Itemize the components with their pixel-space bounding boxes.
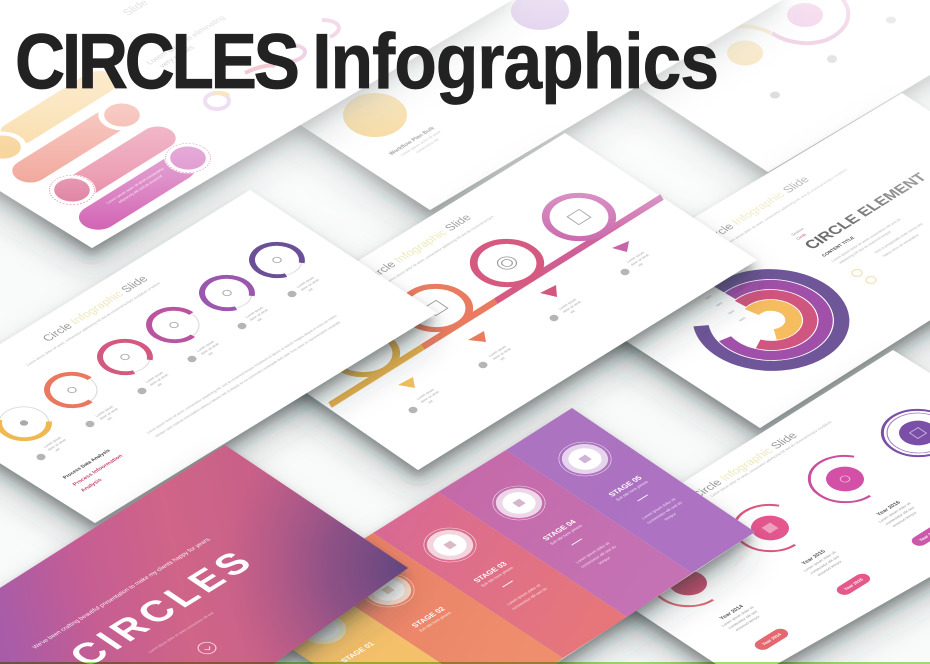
icon: yellow ring [316,322,410,384]
column: stage 03 content: Lorem ipsum dolor sit [505,583,543,606]
chart arc: purple [694,270,848,370]
text: ring labels: Lorem ipsum [145,371,165,384]
heading: circle element: CIRCLE ELEMENT [801,170,930,252]
column: stage 01 content: STAGE 01 [339,640,376,664]
text: cover caption: Lorem ipsum dolor sit amet consectetur elit sed [148,611,215,654]
text: ring labels: dolor sit amet [249,308,269,321]
icon: yellow node [727,40,763,66]
text: year caption: consectetur elit [415,137,441,154]
text: ring labels: elit [207,351,214,356]
group: year 2016: eiusmod tempor [892,511,919,528]
group: year 2014 [638,550,802,659]
text: ring labels: Lorem ipsum [196,340,216,353]
icon: label glyphs [408,269,630,413]
bar: purple [71,151,203,235]
chart: timeline bar [330,197,662,405]
text: circle tag: Circle [795,232,808,241]
icon: purple ring [532,186,626,248]
column: stage 05 content: STAGE 05 [606,474,644,498]
column: stage 05 content [548,435,691,529]
text: arc labels: Item [738,316,747,322]
stripe: stage 03 [373,492,627,658]
text: paragraph: Lorem ipsum dolor sit amet, consectetur adipiscing elit, sed do eiusmod tempor incididunt ut labore et dolore magna aliqua ut enim ad minim [146,314,338,435]
text: ring labels [43,276,324,454]
stripe: stage 02 [307,533,563,664]
text: body copy [831,213,930,277]
column: stage 02 content [351,566,456,635]
icon: triangle markers [398,241,629,388]
icon: purple circle [511,0,569,30]
text: ring labels: Lorem ipsum [245,306,265,319]
text: year caption: Workflow Plan Bulk [388,125,437,156]
text: bar captions: adipiscing elit sed do eiusmod [117,175,164,204]
text: subtitle: Lorem ipsum dolor sit amet, consectetur adipiscing elit sed do eiusmod tempor incididunt ut labore [26,282,161,367]
text: subtitle: Lorem ipsum dolor sit amet, consectetur adipiscing elit sed do eiusmod tempor [386,215,496,284]
text: timeline labels: Lorem ipsum [558,298,578,311]
text: timeline labels: dolor sit amet [492,347,512,360]
chart arc: yellow [740,300,802,340]
text: body copy: Sed ut perspiciatis unde omnis iste [874,222,924,254]
text: process information: Process Infoormation [72,454,125,487]
group: year 2016 [795,446,930,555]
text: arc labels: Item [727,309,736,315]
column: stage 05 content: Lorem ipsum dolor sit [640,497,678,520]
group: year 2014: eiusmod tempor [735,615,762,632]
column: stage 04 content: Lorem ipsum dolor sit [574,541,612,564]
bar: salmon [5,105,135,187]
icon: pink ring [460,232,554,294]
icon: purple badge [154,136,222,180]
group: year 2016: consectetur elit sed [884,506,915,526]
column: stage 03 content: STAGE 03 [471,560,509,584]
icon: orange ring [389,277,483,339]
icon: circle arrow [194,640,220,656]
text: ring labels: elit [106,416,113,421]
text: ring labels: dolor sit amet [47,438,67,451]
icon: salmon badge [88,93,156,137]
panel: top left slide with rounded bars [0,0,512,248]
icon: pink node [787,3,823,27]
text: year caption: Lorem ipsum dolor sit amet [400,130,443,157]
stripe: stage 05 [506,408,755,573]
text: timeline labels: elit [569,309,576,314]
bar: pink [53,122,183,204]
icon: small faded rings [205,20,339,109]
chart: magenta ring [136,300,212,350]
text: ring labels: dolor sit amet [149,373,169,386]
text: year caption [388,125,448,163]
column: stage 05 content: consectetur elit sed do [645,500,684,524]
column: stage 04 content [482,479,625,573]
text: ring labels: dolor sit amet [99,407,119,420]
text: season: Season [790,227,805,237]
title: Infographics [312,17,718,105]
panel: stages slide [241,408,755,664]
text: process data analysis: Process Data Analysis [62,448,112,480]
group: year 2014: Year 2014 [761,632,783,646]
text: timeline labels: elit [637,262,644,267]
text: ring labels: elit [307,287,314,292]
text: ring labels: elit [54,447,61,452]
column: stage 04 content: tempor [597,555,612,565]
text: body copy: Natus error sit voluptatem [882,233,920,257]
chart: orange ring [34,366,110,414]
group: year 2016: Lorem ipsum dolor sit [878,501,913,523]
column: stage 03 content [413,521,550,612]
heading: slide title: Circle Infographic Slide [702,175,812,244]
icon: pink ribbon curve [772,0,848,43]
stripe: stage 04 [438,450,692,617]
panel: circle element slide [560,93,930,428]
text: content title: CONTENT TITLE [821,236,856,258]
group: year 2014: consectetur elit sed [727,610,758,630]
column: stage 05 content: tempor [663,511,678,521]
heading: slide title: Circle Infographic Slide [364,213,474,282]
group: year 2016: Year 2016 [876,500,902,517]
column: stage 04 content: STAGE 04 [540,518,579,542]
group: year 2014: Year 2014 [719,604,746,621]
text: timeline labels: Lorem ipsum [626,251,646,264]
chart: pink ring [79,327,171,387]
text: timeline labels: elit [499,356,506,361]
text: timeline labels: dolor sit amet [630,253,650,266]
column: stage 04 content: Sub title here please [548,523,584,546]
text: bar captions: Lorem ipsum dolor sit amet consectetur [106,167,166,205]
group: year 2015: Year 2015 [843,577,865,591]
text: ring labels: dolor sit amet [200,342,220,355]
group: year 2015: Year 2015 [801,549,827,566]
gradient: dark purple corner [0,445,408,664]
icon: ring glyphs [424,209,591,316]
column: stage 01 content [290,608,378,664]
chart: yellow ring [0,391,74,455]
text: ring labels: dolor sit amet [300,278,320,291]
text: subtitle: Lorem ipsum dolor sit amet, consectetur adipiscing elit, sed do eiusmod tempor incididunt [725,168,849,246]
text: ring labels: elit [156,382,163,387]
column: stage 02 content: STAGE 02 [409,605,447,629]
heading: faded slide text: very emails [157,44,197,69]
icon: yellow circle [343,93,407,137]
group: year 2015: Lorem ipsum dolor sit [803,550,838,572]
icon: yellow ribbon curve [712,26,771,37]
text: tagline: We've been crafting beautiful presentation to make my clients happy for years. [32,537,213,650]
heading: faded slide text: Lorem ipsum is eliminating [144,14,227,66]
group: year 2015: eiusmod tempor [817,560,844,577]
text: timeline labels [416,251,654,406]
icon: yellow badge [0,125,37,169]
title: CIRCLES [15,17,298,105]
text: timeline labels: Lorem ipsum [416,388,436,401]
text: arc labels: Item [715,301,724,307]
icon: label dots [770,16,896,98]
column: stage 04 content: consectetur elit sed do [579,544,618,568]
text: ring labels: Lorem ipsum [296,276,316,289]
panel: top right slide with ribbon [505,0,930,172]
heading: slide title: Circle Infographic Slide [690,431,800,500]
column: stage 03 content: consectetur elit sed do [510,586,549,610]
text: timeline labels: dolor sit amet [420,390,440,403]
text: ring labels: Lorem ipsum [95,405,115,418]
chart: dark purple ring [231,230,323,290]
panel: timeline slide [230,133,757,470]
bar: yellow [0,66,124,149]
text: subtitle: Lorem ipsum dolor sit amet, consectetur adipiscing elit sed do eiusmod tempor incididunt [710,421,833,498]
icon: label glyphs [36,291,296,460]
text: paragraph: Veniam quis nostrud exercitation ullamco laboris nisi ut aliquip ex ea commodo consequat duis aute irure dolor in reprehenderit voluptate [154,321,342,438]
text: ring labels: Lorem ipsum [43,436,63,449]
stripe: stage 01 [241,575,442,664]
chart: concentric arcs [664,251,878,389]
heading: slide title: Circle Infographic Slide [41,274,151,344]
icon: pink badge [38,168,106,212]
group: year 2017 ring [868,400,930,466]
group: year 2014: Lorem ipsum dolor sit [721,605,756,627]
text: ring labels: elit [256,317,263,322]
group: year 2015: consectetur elit sed [809,555,840,575]
text: timeline labels: Lorem ipsum [488,345,508,358]
chart: purple ring [181,263,273,323]
text: arc labels [704,294,747,322]
text: timeline labels: dolor sit amet [562,300,582,313]
chart arc: pink [716,284,826,356]
icon: pale item markers [852,270,876,284]
text: body copy: Lorem ipsum dolor sit amet consectetur elit sed do [831,218,902,263]
column: stage 03 content: Sub title here please [479,565,515,588]
column: stage 02 content: Sub title here please [417,610,453,633]
text: body copy: adipiscing elit sed do eiusmod tempor [838,230,893,264]
text: arc labels: Item [704,294,713,300]
chart arc: dark purple [671,255,871,385]
text: timeline labels: elit [427,399,434,404]
group: year 2015 [720,495,884,604]
panel: top centre slide [110,0,782,210]
panel: year rings slide [560,350,930,664]
text: analysis: Analysis [80,478,104,493]
column: stage 05 content: Sub title here please [614,479,650,502]
panel: cover slide [0,445,408,664]
panel: five rings slide [0,190,437,523]
